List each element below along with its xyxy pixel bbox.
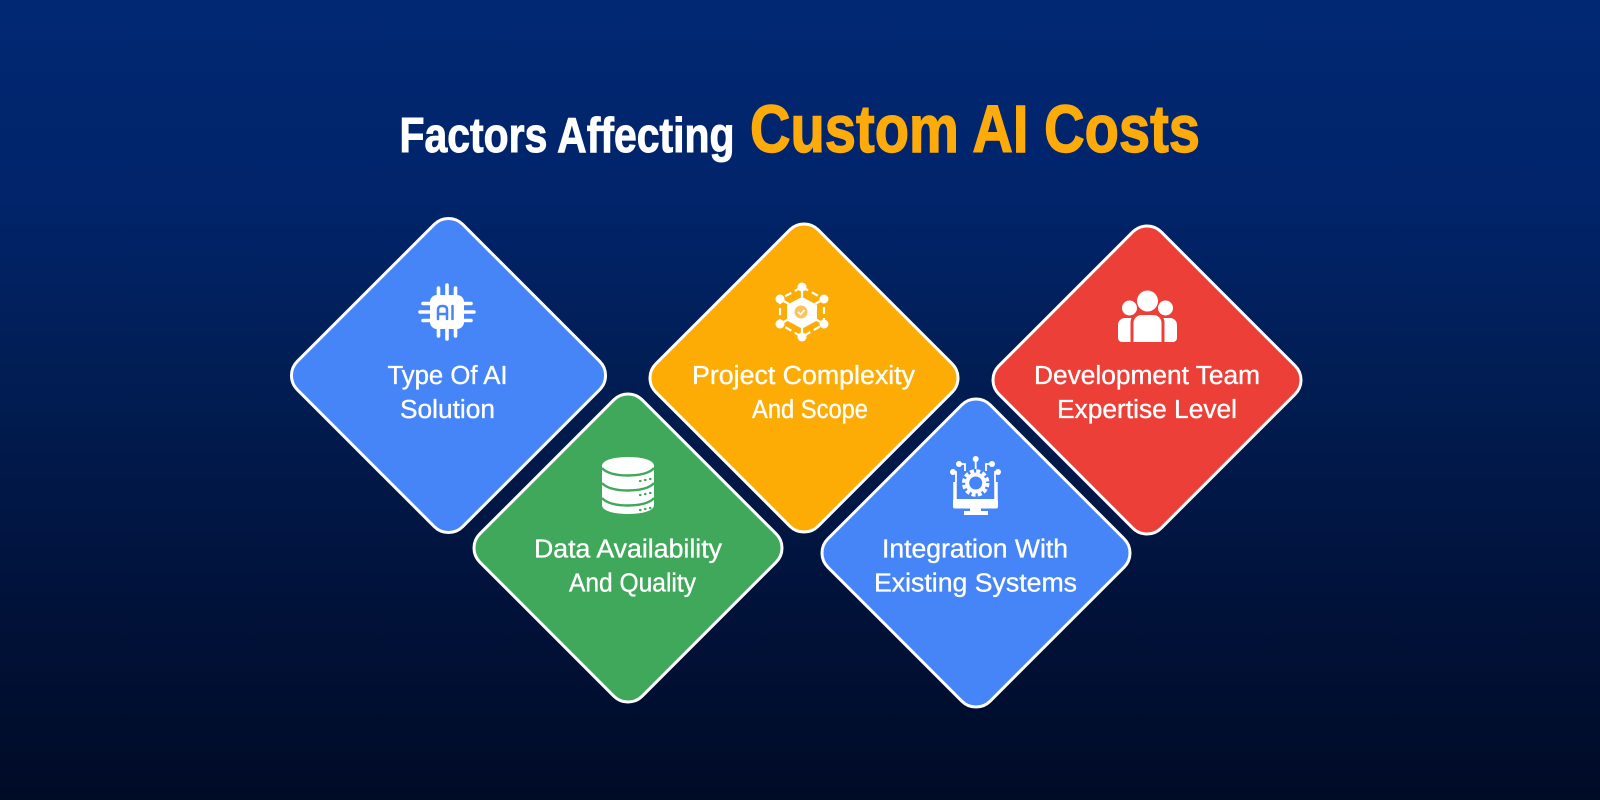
label: development team expertise level: Development Team <box>1034 362 1260 390</box>
panel: type of AI solution <box>283 210 614 541</box>
label: integration with existing systems: Existing Systems <box>874 570 1077 598</box>
label: project complexity and scope: And Scope <box>752 396 868 424</box>
title <box>400 92 1200 167</box>
label: integration with existing systems <box>874 536 1077 598</box>
label: development team expertise level: Expertise Level <box>1057 396 1237 424</box>
icon: hexagon network <box>776 282 828 342</box>
label: integration with existing systems: Integration With <box>882 536 1068 564</box>
label: project complexity and scope: Project Complexity <box>692 362 915 390</box>
label: type of AI solution: Type Of AI <box>388 362 508 390</box>
title: amber part: Custom AI Costs <box>750 92 1200 167</box>
label: data availability and quality: And Quality <box>569 570 696 598</box>
title: white part: Factors Affecting <box>400 109 734 163</box>
panel: data availability and quality <box>466 386 790 710</box>
label: type of AI solution <box>388 362 508 424</box>
panel: project complexity and scope <box>642 216 966 540</box>
panel: integration with existing systems <box>814 391 1138 715</box>
label: data availability and quality <box>534 536 722 598</box>
icon: monitor with gear <box>950 456 1001 515</box>
panel: development team expertise level <box>985 218 1309 542</box>
label: project complexity and scope <box>692 362 915 424</box>
icon: AI chip <box>420 285 474 339</box>
label: type of AI solution: Solution <box>400 396 495 424</box>
label: data availability and quality: Data Availability <box>534 536 722 564</box>
icon: database <box>602 457 654 514</box>
label: development team expertise level <box>1034 362 1260 424</box>
icon: team of people <box>1118 290 1177 342</box>
